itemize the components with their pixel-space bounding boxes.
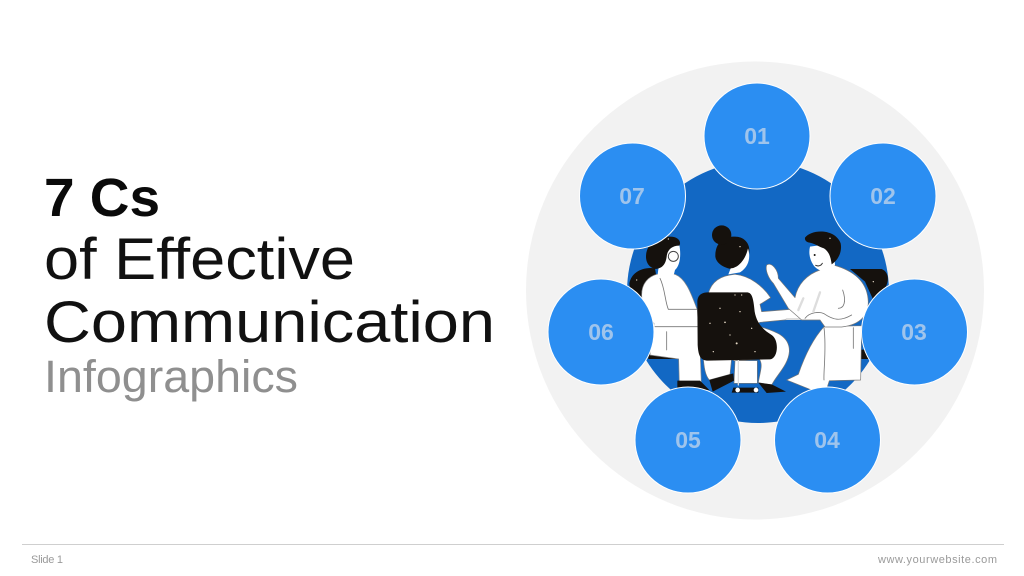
inner blue circle bbox=[627, 161, 889, 423]
person: middle woman bbox=[703, 225, 802, 393]
background circle bbox=[526, 62, 984, 520]
left chair and stool bbox=[629, 268, 682, 359]
table bbox=[787, 316, 828, 322]
node 05: 05 bbox=[675, 427, 701, 453]
node 01 bbox=[704, 83, 810, 189]
node 05 bbox=[635, 387, 741, 493]
title bbox=[44, 168, 495, 402]
footer: slide number: Slide 1 bbox=[31, 554, 63, 566]
node 02: 02 bbox=[870, 183, 896, 209]
node 06 bbox=[548, 279, 654, 385]
node 02 bbox=[830, 143, 936, 249]
node 03: 03 bbox=[901, 319, 927, 345]
person: left bbox=[642, 237, 709, 390]
footer: website: www.yourwebsite.com bbox=[877, 554, 997, 566]
heading: 7 Cs: 7 Cs bbox=[44, 168, 160, 228]
person: right man bbox=[766, 232, 868, 390]
heading: of Effective: of Effective bbox=[44, 227, 355, 292]
node 07 bbox=[580, 143, 686, 249]
middle chair bbox=[697, 292, 777, 385]
node 01: 01 bbox=[744, 123, 770, 149]
speckles on dark shapes bbox=[636, 238, 874, 352]
panel: circular diagram bbox=[526, 62, 984, 520]
illustration: team meeting bbox=[629, 225, 888, 393]
heading: Communication: Communication bbox=[44, 290, 495, 355]
node 03 bbox=[862, 279, 968, 385]
node 04 bbox=[774, 387, 880, 493]
node 06: 06 bbox=[588, 319, 614, 345]
node 04: 04 bbox=[814, 427, 840, 453]
node 07: 07 bbox=[619, 183, 645, 209]
right chair and stool bbox=[848, 269, 888, 359]
subheading: Infographics: Infographics bbox=[44, 351, 298, 402]
